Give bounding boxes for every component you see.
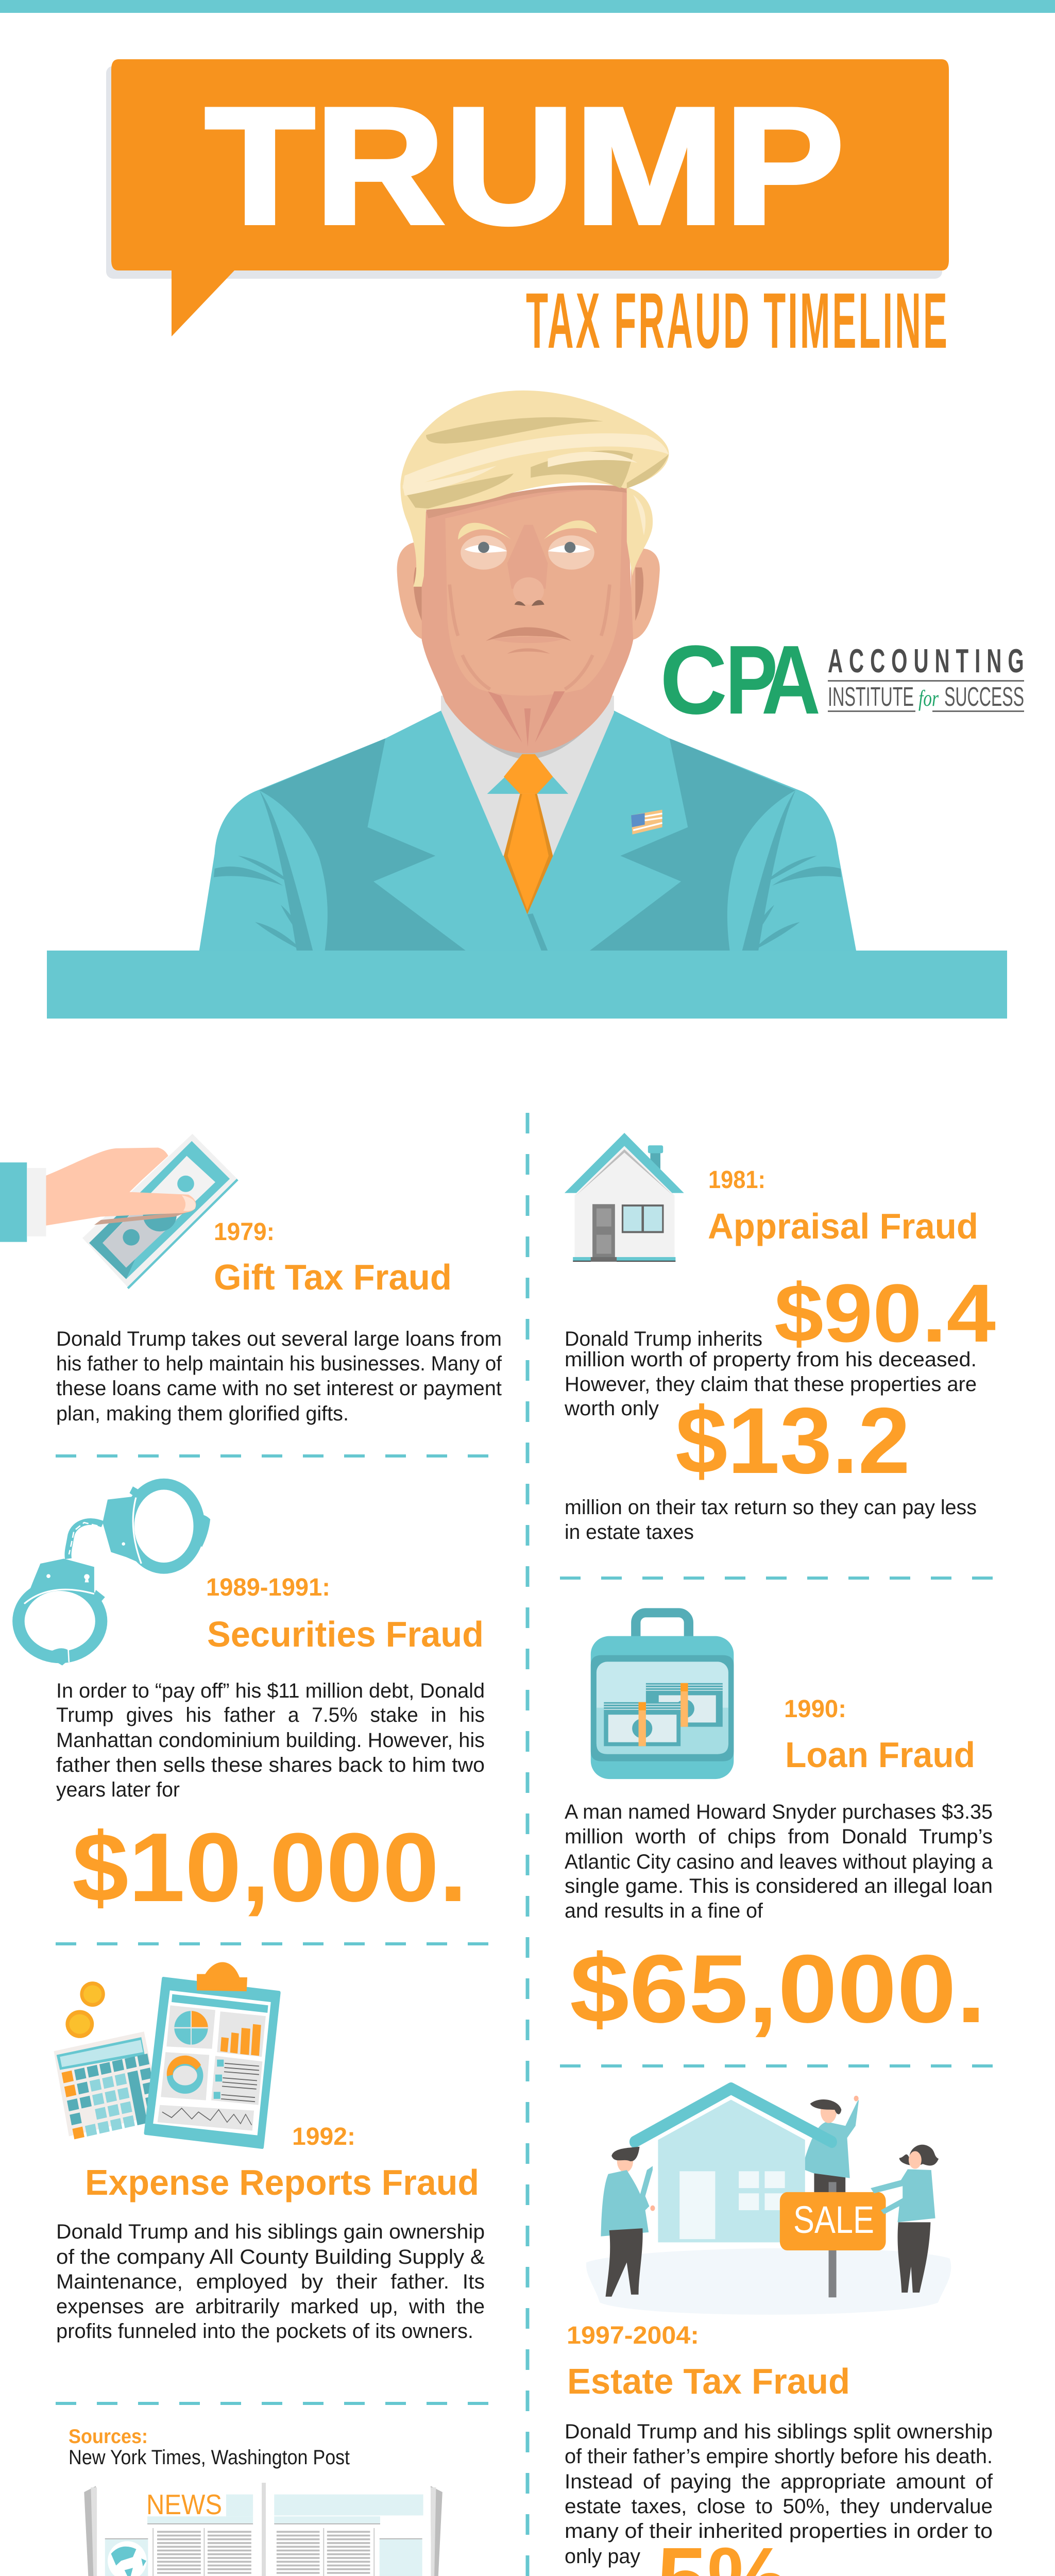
big number: $10,000. xyxy=(72,1813,467,1922)
logo: CPA Accounting Institute for Success: for xyxy=(918,686,939,711)
top bar xyxy=(0,0,1055,13)
icon: handcuffs xyxy=(19,1484,210,1666)
body text: In order to “pay off” his $11 million debt, Donald xyxy=(56,1680,485,1702)
body text: million worth of chips from Donald Trump’s xyxy=(565,1825,993,1848)
logo: CPA Accounting Institute for Success xyxy=(660,625,1024,735)
panel: Securities Fraud xyxy=(19,1484,485,1922)
body text: million worth of property from his deceased. xyxy=(565,1348,977,1371)
body text xyxy=(56,1328,502,1425)
body text: his father to help maintain his businesses. Many of xyxy=(56,1352,502,1375)
body text xyxy=(564,1328,977,1420)
body text: these loans came with no set interest or payment xyxy=(56,1377,502,1400)
panel: Loan Fraud xyxy=(565,1613,993,2043)
panel: Appraisal Fraud xyxy=(564,1133,996,1544)
year: 1989-1991: xyxy=(206,1574,330,1601)
heading: Estate Tax Fraud xyxy=(567,2361,850,2401)
subtitle: TAX FRAUD TIMELINE xyxy=(526,277,947,365)
body text: single game. This is considered an illegal loan xyxy=(565,1875,993,1897)
year: 1990: xyxy=(784,1696,846,1723)
body text: Maintenance, employed by their father. Its xyxy=(56,2270,485,2293)
logo: CPA Accounting Institute for Success: ACCOUNTING xyxy=(828,642,1024,680)
body text: expenses are arbitrarily marked up, with the xyxy=(56,2295,485,2318)
heading: Appraisal Fraud xyxy=(708,1206,978,1246)
year: 1981: xyxy=(708,1166,765,1194)
heading: Securities Fraud xyxy=(207,1614,484,1654)
big number: $13.2 xyxy=(675,1388,910,1493)
icon: newspaper: NEWS xyxy=(146,2488,222,2520)
body text: years later for xyxy=(56,1778,180,1801)
body text continued xyxy=(565,1496,977,1544)
body text xyxy=(565,2420,993,2568)
body text: plan, making them glorified gifts. xyxy=(56,1402,349,1425)
icon: flag pin xyxy=(631,810,662,835)
sources list: New York Times, Washington Post xyxy=(69,2446,350,2469)
desk xyxy=(47,951,1007,1019)
body text continued: million on their tax return so they can pay less xyxy=(565,1496,977,1519)
illustration: Trump portrait at desk xyxy=(47,391,1007,1019)
body text: However, they claim that these properties are xyxy=(565,1373,977,1396)
big number: $65,000. xyxy=(570,1935,986,2043)
logo: CPA Accounting Institute for Success: INSTITUTE xyxy=(828,682,914,712)
icon: people selling a house xyxy=(586,2089,951,2315)
big number: $90.4 xyxy=(774,1267,996,1359)
body text: Donald Trump and his siblings gain ownership xyxy=(56,2221,485,2243)
icon: calculator and clipboard xyxy=(54,1962,279,2147)
body text: of the company All County Building Supply & xyxy=(56,2246,485,2268)
panel: Estate Tax Fraud xyxy=(565,2089,993,2576)
body text continued: in estate taxes xyxy=(565,1521,694,1544)
logo: CPA Accounting Institute for Success: A xyxy=(761,625,821,735)
body text xyxy=(56,1680,485,1801)
body text: father then sells these shares back to him two xyxy=(56,1754,485,1776)
body text: profits funneled into the pockets of its owners. xyxy=(56,2320,473,2343)
heading: Expense Reports Fraud xyxy=(85,2162,479,2202)
icon: newspaper xyxy=(84,2483,443,2576)
body text: many of their inherited properties in order to xyxy=(565,2520,993,2543)
panel: Gift Tax Fraud xyxy=(0,1134,502,1425)
body text xyxy=(565,1801,993,1922)
body text: worth only xyxy=(564,1397,659,1420)
body text: A man named Howard Snyder purchases $3.35 xyxy=(565,1801,993,1823)
icon: house xyxy=(565,1133,684,1262)
body text: estate taxes, close to 50%, they undervalue xyxy=(565,2495,993,2518)
title speech bubble: TRUMP xyxy=(205,74,844,259)
year: 1992: xyxy=(292,2123,355,2150)
year: 1979: xyxy=(214,1218,275,1246)
body text: Manhattan condominium building. However, his xyxy=(56,1729,485,1752)
body text: Donald Trump and his siblings split ownership xyxy=(565,2420,993,2443)
logo: CPA Accounting Institute for Success: C xyxy=(660,625,727,735)
body text: Instead of paying the appropriate amount of xyxy=(565,2470,993,2493)
body text: Trump gives his father a 7.5% stake in his xyxy=(56,1704,485,1726)
panel: Sources xyxy=(69,2426,443,2576)
icon: hand holding money xyxy=(0,1134,237,1289)
icon: briefcase of money xyxy=(591,1613,734,1779)
year: 1997-2004: xyxy=(567,2322,699,2349)
body text: Donald Trump inherits xyxy=(565,1328,762,1350)
title speech bubble xyxy=(106,59,949,336)
sources label: Sources: xyxy=(69,2426,148,2448)
body text: Atlantic City casino and leaves without playing a xyxy=(565,1851,993,1873)
body text: Donald Trump takes out several large loans from xyxy=(56,1328,502,1350)
body text: only pay xyxy=(565,2545,640,2568)
body text: of their father’s empire shortly before his death. xyxy=(565,2445,993,2468)
panel: Expense Reports Fraud xyxy=(54,1962,485,2343)
heading: Loan Fraud xyxy=(785,1735,975,1775)
logo: CPA Accounting Institute for Success: P xyxy=(725,625,778,735)
body text xyxy=(56,2221,485,2343)
sale sign text: SALE xyxy=(793,2198,874,2241)
body text: and results in a fine of xyxy=(565,1900,763,1922)
heading: Gift Tax Fraud xyxy=(214,1257,452,1297)
